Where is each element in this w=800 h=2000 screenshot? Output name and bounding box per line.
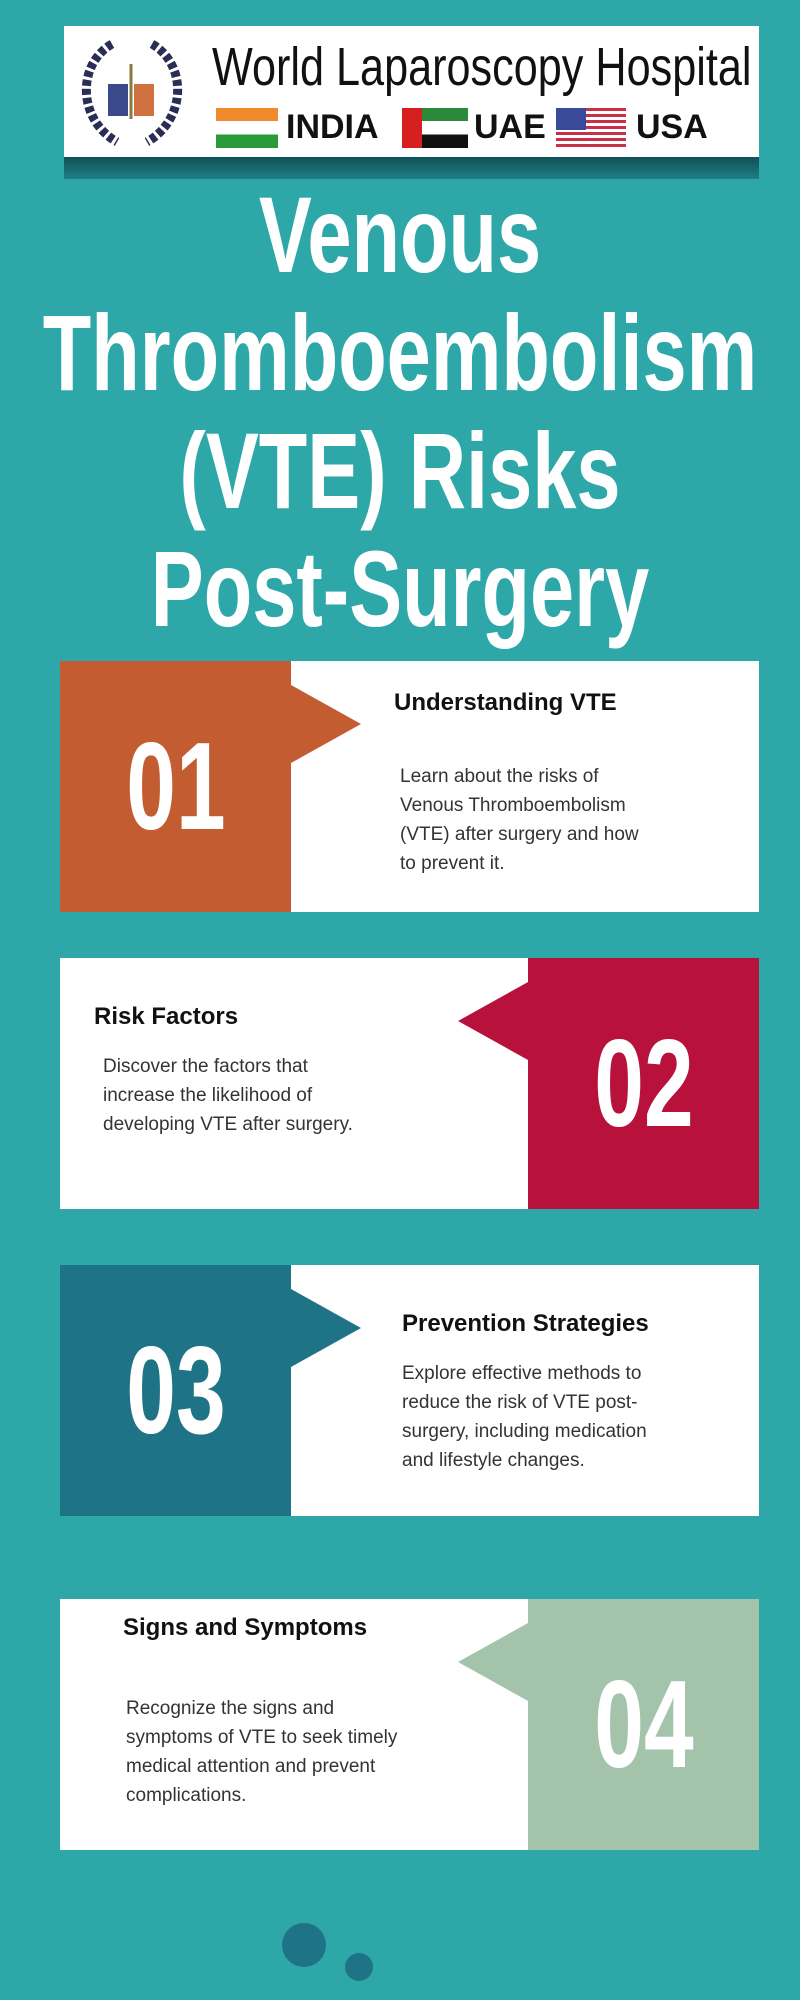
text 01: Learn about the risks of Venous Thromboembolism (VTE) after surgery and how to prevent it. <box>400 766 639 874</box>
flags row <box>216 108 708 148</box>
number 01: 01 <box>126 718 225 856</box>
title: Post-Surgery <box>151 528 649 649</box>
heading 01: Understanding VTE <box>394 689 617 716</box>
logo text: World Laparoscopy Hospital <box>212 37 751 97</box>
arrow 01 <box>291 685 361 763</box>
arrow 03 <box>291 1289 361 1367</box>
panel: 01 understanding VTE <box>60 661 759 912</box>
arrow 04 <box>458 1623 528 1701</box>
title: (VTE) Risks <box>179 410 621 531</box>
text 02: Discover the factors that increase the likelihood of developing VTE after surgery. <box>103 1056 353 1135</box>
number 02 <box>528 958 759 1209</box>
number 03: 03 <box>126 1322 225 1460</box>
text 03: Explore effective methods to reduce the risk of VTE post-surgery, including medication and lifestyle changes. <box>402 1363 647 1471</box>
title <box>43 174 757 649</box>
heading 02: Risk Factors <box>94 1003 238 1030</box>
arrow 02 <box>458 982 528 1060</box>
flags row: UAE <box>474 108 546 146</box>
panel: 04 signs <box>60 1599 759 1850</box>
flags row: INDIA <box>286 108 379 146</box>
number 04 <box>528 1599 759 1850</box>
title: Venous <box>259 174 541 295</box>
decorative dots <box>282 1923 373 1981</box>
heading 03: Prevention Strategies <box>402 1310 649 1337</box>
number 04: 04 <box>594 1656 693 1794</box>
number 02: 02 <box>594 1014 693 1152</box>
flags row: USA <box>636 108 708 146</box>
icon: laurel emblem <box>82 40 182 146</box>
text 04: Recognize the signs and symptoms of VTE to seek timely medical attention and prevent complications. <box>126 1698 397 1806</box>
panel: 03 prevention <box>60 1265 759 1516</box>
number 01 <box>60 661 291 912</box>
logo banner <box>64 26 759 179</box>
heading 04: Signs and Symptoms <box>123 1614 367 1641</box>
panel: 02 risk factors <box>60 958 759 1209</box>
title: Thromboembolism <box>43 292 757 413</box>
number 03 <box>60 1265 291 1516</box>
